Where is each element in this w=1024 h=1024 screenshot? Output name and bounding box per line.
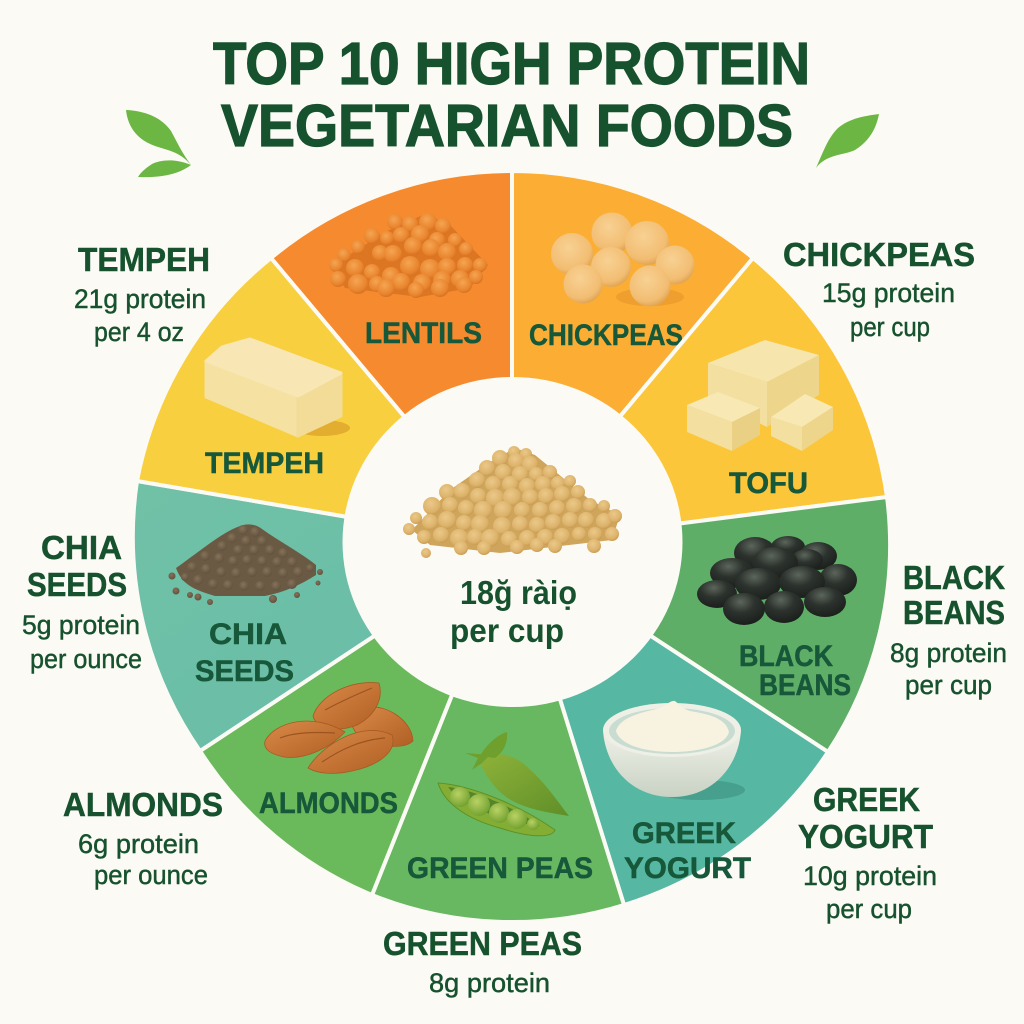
panel: black beans (512, 497, 890, 752)
callout: black beans (890, 559, 1007, 700)
icon: right leaf (816, 114, 879, 168)
panel: lentils (271, 171, 512, 545)
callout: chickpeas: per cup (850, 312, 930, 342)
callout: chia seeds: 5g protein (22, 610, 140, 640)
callout: tempeh: per 4 oz (94, 317, 184, 347)
icon: central lentil pile (403, 446, 622, 558)
callout: black beans: 8g protein (890, 638, 1007, 668)
icon: lentil pile (329, 213, 488, 298)
callout: chia seeds: SEEDS (27, 566, 127, 603)
panel: tofu (512, 258, 887, 545)
callout: greek yogurt: YOGURT (798, 818, 933, 855)
icon: black beans (697, 536, 857, 625)
icon: almonds (265, 683, 413, 773)
panel: greek yogurt (512, 545, 828, 905)
icon: left leaves (126, 110, 191, 177)
callout: chickpeas: 15g protein (822, 278, 955, 308)
label: tempeh: TEMPEH (205, 447, 324, 480)
title (213, 31, 810, 159)
icon: yogurt bowl (603, 701, 745, 800)
icon: chia seed pile (168, 524, 323, 605)
wheel of food segments (133, 171, 890, 922)
label: greek yogurt (624, 817, 751, 885)
icon: chickpeas (551, 212, 694, 306)
center text: per cup (450, 612, 564, 649)
title: VEGETARIAN FOODS (221, 93, 793, 159)
callout: almonds (63, 786, 223, 890)
label: chickpeas: CHICKPEAS (529, 319, 683, 352)
panel: chia seeds (133, 481, 512, 751)
center text (450, 574, 577, 649)
panel: center circle (342, 377, 682, 707)
panel: chickpeas (512, 171, 753, 545)
callout: green peas (383, 925, 582, 998)
callout: tempeh: TEMPEH (78, 241, 210, 278)
panel: green peas (372, 545, 624, 922)
callout: tempeh: 21g protein (74, 284, 206, 314)
callout: greek yogurt: GREEK (813, 781, 920, 818)
label: black beans (739, 640, 851, 702)
callout: green peas: 8g protein (429, 968, 550, 998)
callout: chickpeas: CHICKPEAS (783, 236, 975, 273)
label: almonds: ALMONDS (259, 787, 398, 820)
label: black beans: BLACK (739, 640, 833, 673)
label: chia seeds: CHIA (209, 618, 287, 651)
label: chia seeds (195, 618, 294, 688)
callout: almonds: 6g protein (78, 829, 199, 859)
label: tofu: TOFU (729, 467, 808, 500)
label: greek yogurt: YOGURT (624, 852, 751, 885)
callout: black beans: BEANS (903, 594, 1005, 631)
callout: chia seeds: per ounce (30, 644, 142, 674)
label: black beans: BEANS (759, 669, 851, 702)
icon: tofu cubes (687, 340, 833, 451)
callout: almonds: ALMONDS (63, 786, 223, 823)
callout: chia seeds: CHIA (41, 529, 122, 566)
callout: chickpeas (783, 236, 975, 342)
callout: black beans: per cup (905, 670, 992, 700)
label: greek yogurt: GREEK (632, 817, 736, 850)
callout: chia seeds (22, 529, 142, 674)
callout: green peas: GREEN PEAS (383, 925, 582, 962)
center text: 18ğ ràiọ (460, 574, 577, 611)
callout: greek yogurt: per cup (826, 894, 912, 924)
callout: almonds: per ounce (94, 860, 208, 890)
panel: tempeh (137, 258, 512, 545)
callout: greek yogurt: 10g protein (803, 861, 937, 891)
callout: tempeh (74, 241, 210, 347)
label: lentils: LENTILS (365, 317, 482, 350)
title: TOP 10 HIGH PROTEIN (213, 31, 810, 97)
callout: black beans: BLACK (903, 559, 1005, 596)
label: chia seeds: SEEDS (195, 655, 294, 688)
icon: tempeh block (206, 339, 350, 436)
callout: greek yogurt (798, 781, 937, 924)
icon: pea pods (438, 732, 569, 836)
label: green peas: GREEN PEAS (407, 852, 593, 885)
panel: almonds (200, 545, 512, 895)
